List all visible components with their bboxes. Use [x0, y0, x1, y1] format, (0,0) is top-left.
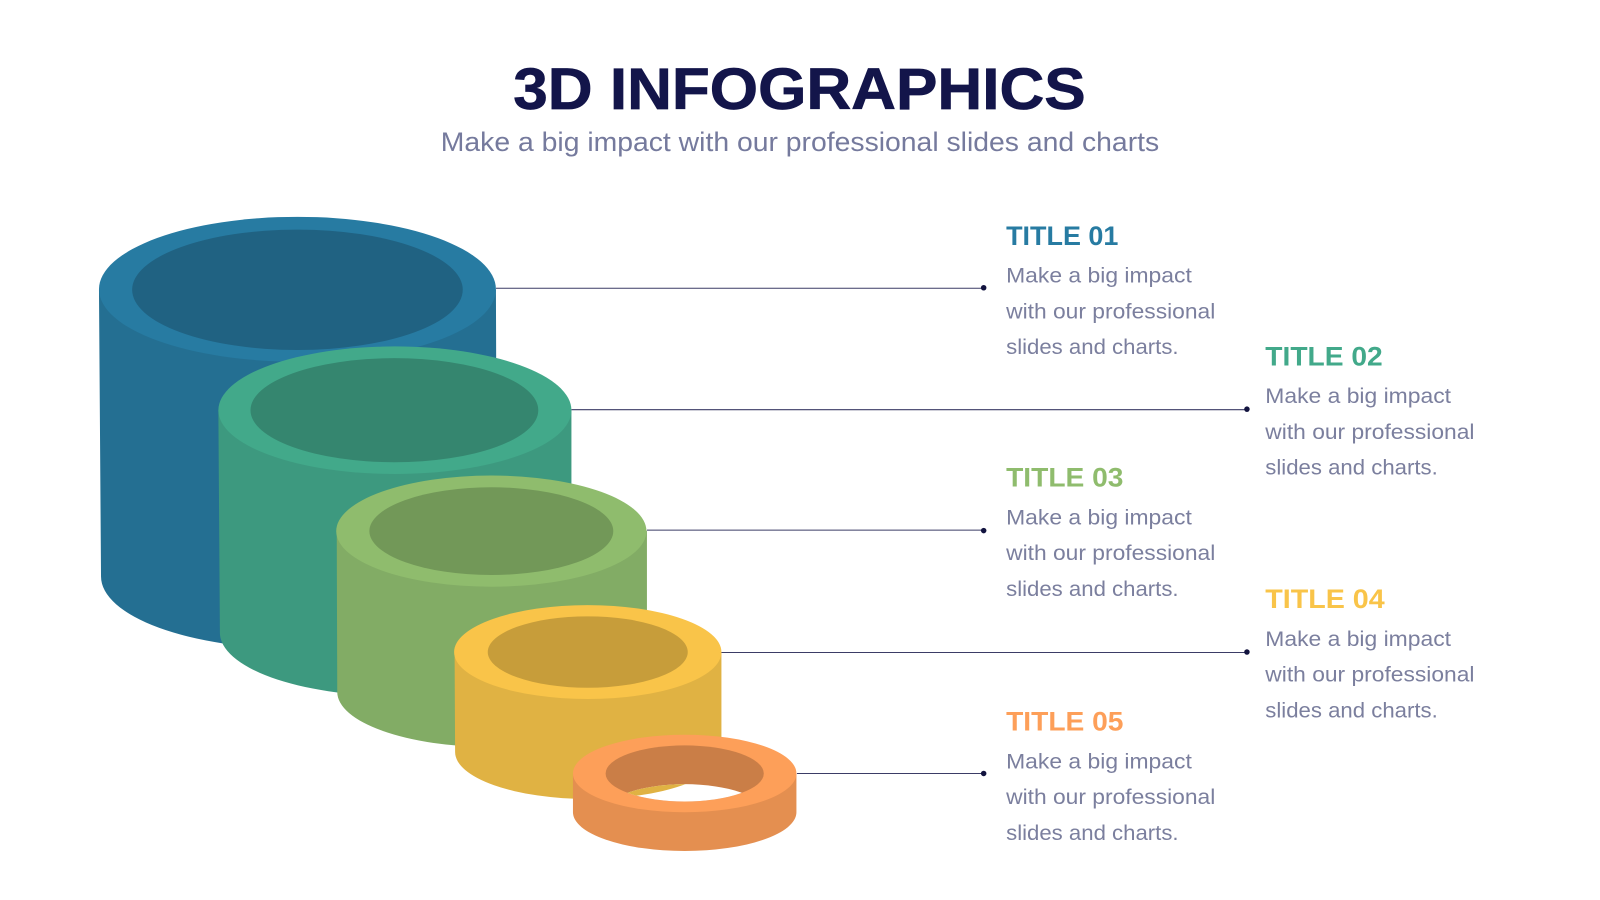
- label 3: slides and charts.: [1006, 578, 1179, 601]
- label 1: [1005, 221, 1215, 359]
- label 2: with our professional: [1264, 421, 1474, 444]
- label 3: [1005, 463, 1215, 601]
- connector line 1: [496, 285, 986, 291]
- cylinder 4: yellow: [454, 605, 721, 799]
- connector line 4: [721, 649, 1250, 655]
- label 1: TITLE 01: [1006, 221, 1119, 251]
- connector line 2: [571, 406, 1250, 412]
- label 4: TITLE 04: [1265, 584, 1385, 614]
- label 2: TITLE 02: [1265, 341, 1383, 371]
- title: 3D INFOGRAPHICS: [513, 57, 1086, 122]
- label 4: [1264, 584, 1474, 722]
- label 3: TITLE 03: [1006, 463, 1123, 493]
- label 5: [1005, 707, 1215, 845]
- cylinder 5: orange ring: [572, 734, 796, 851]
- label 1: Make a big impact: [1006, 265, 1192, 288]
- label 2: [1264, 341, 1474, 479]
- label 5: with our professional: [1005, 786, 1215, 809]
- connector line 3: [647, 528, 986, 533]
- cylinder 3: lime green: [336, 476, 647, 747]
- label 1: with our professional: [1005, 300, 1215, 323]
- cylinder 1: blue: [99, 217, 497, 649]
- label 2: slides and charts.: [1265, 456, 1438, 479]
- label 1: slides and charts.: [1006, 336, 1179, 359]
- label 5: Make a big impact: [1006, 750, 1192, 773]
- label 4: Make a big impact: [1265, 628, 1451, 651]
- cylinder 2: green: [218, 346, 571, 696]
- label 4: with our professional: [1264, 664, 1474, 687]
- subtitle: Make a big impact with our professional slides and charts: [441, 127, 1159, 157]
- label 5: slides and charts.: [1006, 822, 1179, 845]
- label 2: Make a big impact: [1265, 385, 1451, 408]
- label 4: slides and charts.: [1265, 699, 1438, 722]
- label 3: Make a big impact: [1006, 506, 1192, 529]
- label 3: with our professional: [1005, 542, 1215, 565]
- label 5: TITLE 05: [1006, 707, 1124, 737]
- connector line 5: [797, 771, 986, 776]
